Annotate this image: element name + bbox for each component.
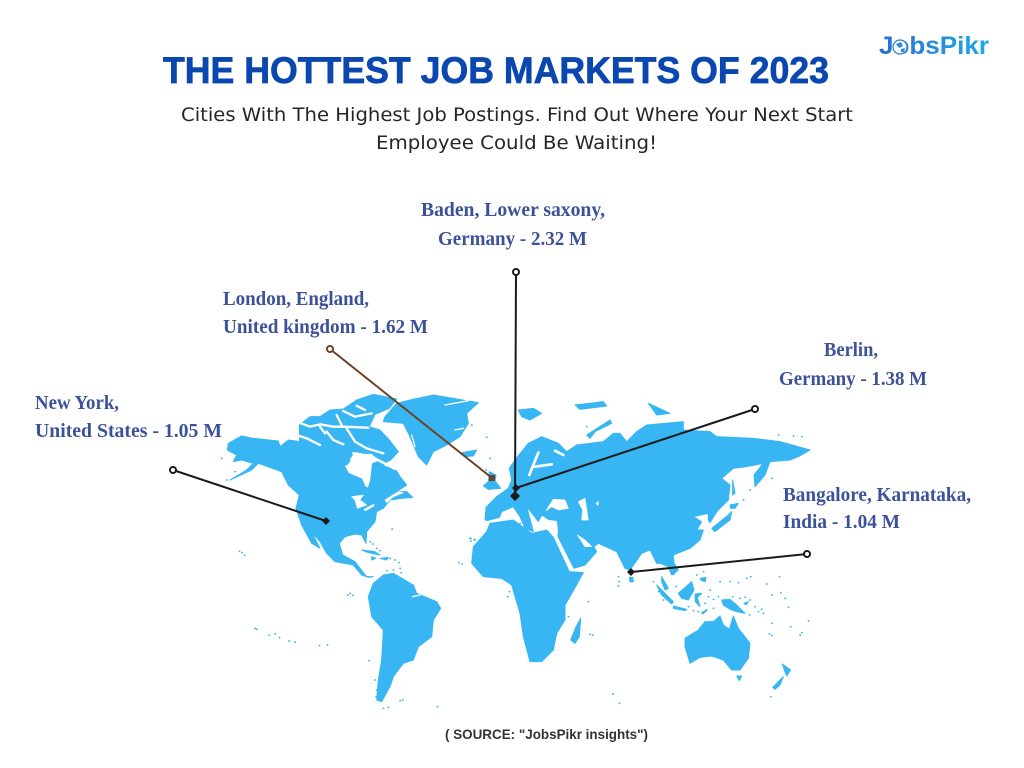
label: London	[223, 289, 428, 338]
subtitle: Cities With The Highest Job Postings. Find Out Where Your Next Start	[181, 104, 853, 126]
pointer: New York	[170, 467, 330, 525]
Australia	[685, 616, 750, 670]
subtitle: Employee Could Be Waiting!	[376, 132, 657, 154]
label: New York: New York,	[35, 393, 119, 414]
Java	[673, 606, 687, 611]
title: THE HOTTEST JOB MARKETS OF 2023	[163, 50, 829, 91]
Sri Lanka	[629, 577, 633, 582]
label: Bangalore: Bangalore, Karnataka,	[783, 485, 971, 506]
map: Eurasia, Africa, Arctic Russia	[470, 402, 810, 703]
Amazon mouth	[413, 595, 420, 597]
Sulawesi	[695, 593, 707, 614]
Africa	[472, 520, 583, 662]
pointer: Berlin	[512, 406, 758, 492]
Foxe Basin	[350, 452, 377, 464]
label: London: United kingdom - 1.62 M	[223, 317, 428, 338]
world map	[222, 394, 810, 708]
New Guinea	[722, 599, 748, 613]
Greenland	[383, 395, 478, 465]
Black Sea, Caspian, Persian Gulf	[546, 498, 599, 547]
Tasmania	[737, 676, 742, 681]
Philippines	[669, 570, 706, 582]
pointer: Bangalore	[627, 551, 810, 576]
Arctic Russian islands	[518, 402, 670, 438]
label: London: London, England,	[223, 289, 369, 310]
North America	[227, 436, 413, 577]
label: Baden	[421, 200, 605, 250]
scattered islands	[222, 458, 475, 708]
Great Lakes	[352, 492, 403, 511]
pointer: Baden	[510, 269, 520, 501]
South America	[368, 573, 441, 702]
pointer: London	[327, 346, 495, 481]
label: New York	[35, 393, 222, 442]
Sumatra	[657, 585, 673, 604]
logo: JobsPikr: JobsPikr	[879, 32, 989, 60]
Arctic channels	[298, 406, 395, 469]
label: Bangalore: India - 1.04 M	[783, 512, 900, 533]
map: Southeast Asia and Oceania	[653, 570, 809, 697]
label: Berlin: Germany - 1.38 M	[779, 369, 927, 390]
Greenland fjords	[412, 401, 468, 447]
Iceland	[462, 450, 477, 457]
Arctic land mass	[299, 394, 398, 465]
label: Baden: Baden, Lower saxony,	[421, 200, 605, 221]
subtitle	[181, 104, 853, 154]
Madagascar	[571, 618, 581, 643]
label: Berlin	[779, 340, 927, 390]
Borneo	[678, 582, 694, 600]
small islands	[470, 425, 802, 703]
map: Arctic archipelago	[298, 394, 398, 469]
Baltic and White seas	[529, 451, 563, 475]
Pacific islands	[653, 572, 809, 697]
label: Baden: Germany - 2.32 M	[438, 229, 587, 250]
label: Berlin: Berlin,	[824, 340, 878, 361]
map: North and South America	[222, 395, 478, 708]
Caribbean	[362, 550, 388, 560]
Malay peninsula	[662, 577, 668, 590]
New Zealand	[773, 664, 791, 689]
Eurasia	[485, 422, 810, 575]
source note: ( SOURCE: "JobsPikr insights")	[445, 726, 648, 742]
label: Bangalore	[783, 485, 971, 533]
Japan and Sakhalin	[708, 480, 738, 532]
British Isles	[483, 472, 501, 489]
label: New York: United States - 1.05 M	[35, 421, 222, 442]
